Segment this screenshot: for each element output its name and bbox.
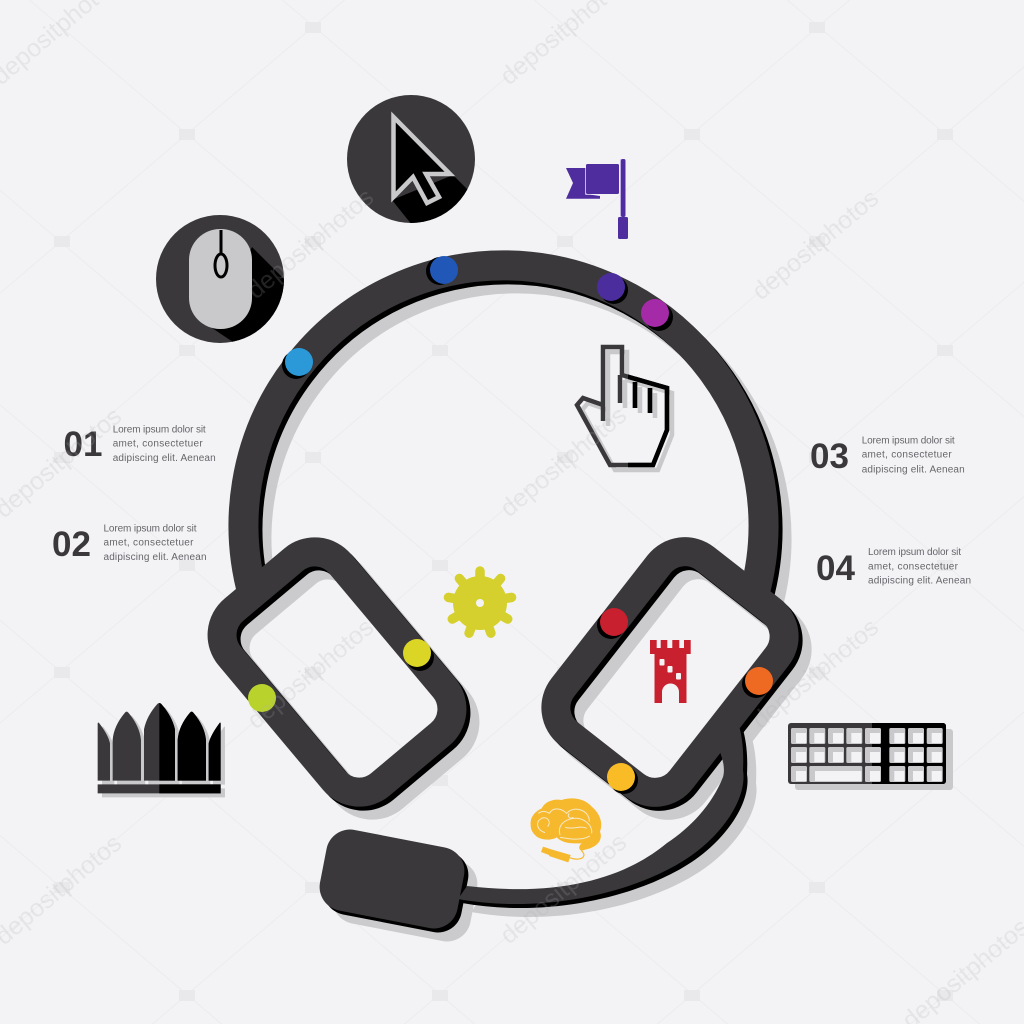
icon: mouse in circle	[156, 215, 284, 343]
icon: keyboard	[788, 723, 953, 790]
colored dot markers	[248, 256, 773, 794]
text block 04: Lorem ipsum dolor sit	[868, 547, 961, 558]
text block 01: Lorem ipsum dolor sit	[113, 425, 206, 436]
watermark text: depositphotos	[747, 613, 884, 735]
watermark text: depositphotos	[242, 183, 379, 305]
text block 02: Lorem ipsum dolor sit	[104, 524, 197, 535]
watermark text: depositphotos	[495, 828, 632, 950]
icon: pointing hand cursor	[577, 347, 672, 470]
watermark text: depositphotos	[242, 613, 379, 735]
text block 01	[64, 425, 216, 464]
text block 04: adipiscing elit. Aenean	[868, 575, 971, 586]
icon: arrow cursor in circle	[347, 95, 475, 223]
text block 02	[52, 524, 206, 564]
text block 03: Lorem ipsum dolor sit	[862, 435, 955, 446]
headset	[209, 256, 810, 946]
watermark text: depositphotos	[495, 401, 632, 523]
text block 02: adipiscing elit. Aenean	[104, 552, 206, 563]
icon: castle tower	[650, 640, 691, 703]
text block 01: 01	[64, 425, 102, 464]
icon: gear	[448, 571, 512, 633]
text block 02: amet, consectetuer	[104, 538, 194, 549]
icon: fence crown	[98, 703, 225, 797]
text block 04: 04	[816, 549, 855, 588]
icon: flag	[566, 159, 628, 239]
text block 03: amet, consectetuer	[862, 450, 952, 461]
text block 04	[816, 547, 971, 588]
text block 03: adipiscing elit. Aenean	[862, 464, 965, 475]
text block 02: 02	[52, 525, 91, 564]
text block 03: 03	[810, 437, 849, 476]
icon: brain with usb plug	[531, 798, 601, 862]
watermark text: depositphotos	[747, 184, 884, 306]
text block 01: amet, consectetuer	[113, 439, 203, 450]
text block 03	[810, 435, 965, 476]
text block 04: amet, consectetuer	[868, 561, 959, 572]
text block 01: adipiscing elit. Aenean	[113, 453, 216, 464]
